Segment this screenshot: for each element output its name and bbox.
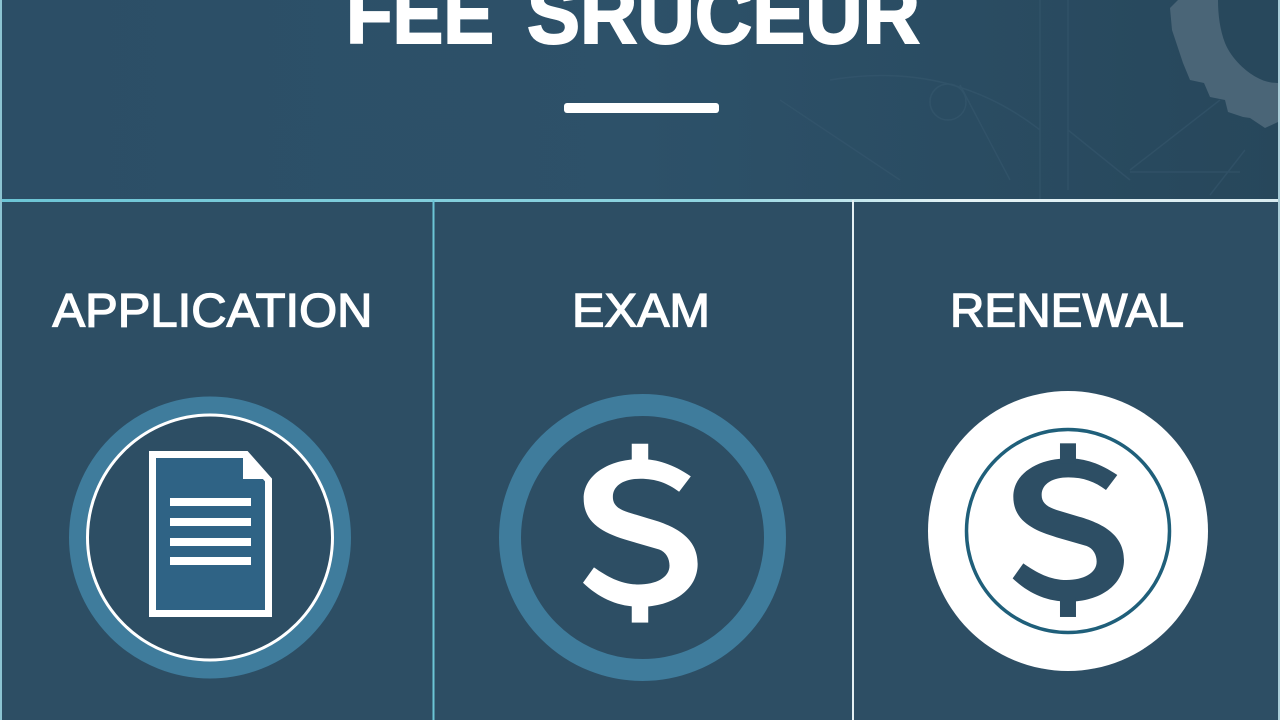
- heading: renewal: RENEWAL: [950, 284, 1184, 336]
- icon: dollar coin: [928, 391, 1208, 671]
- panel: renewal: [928, 284, 1208, 671]
- decorative gear: [1170, 0, 1278, 128]
- title: [346, 0, 920, 61]
- icon: document in circle: [78, 406, 342, 670]
- heading: exam: EXAM: [572, 284, 710, 336]
- panel: header: [0, 0, 1280, 200]
- panel: application: [52, 284, 372, 670]
- title underline: [564, 103, 719, 113]
- heading: application: APPLICATION: [52, 284, 372, 336]
- panel: exam: [510, 284, 775, 670]
- icon: dollar in ring: [510, 405, 775, 670]
